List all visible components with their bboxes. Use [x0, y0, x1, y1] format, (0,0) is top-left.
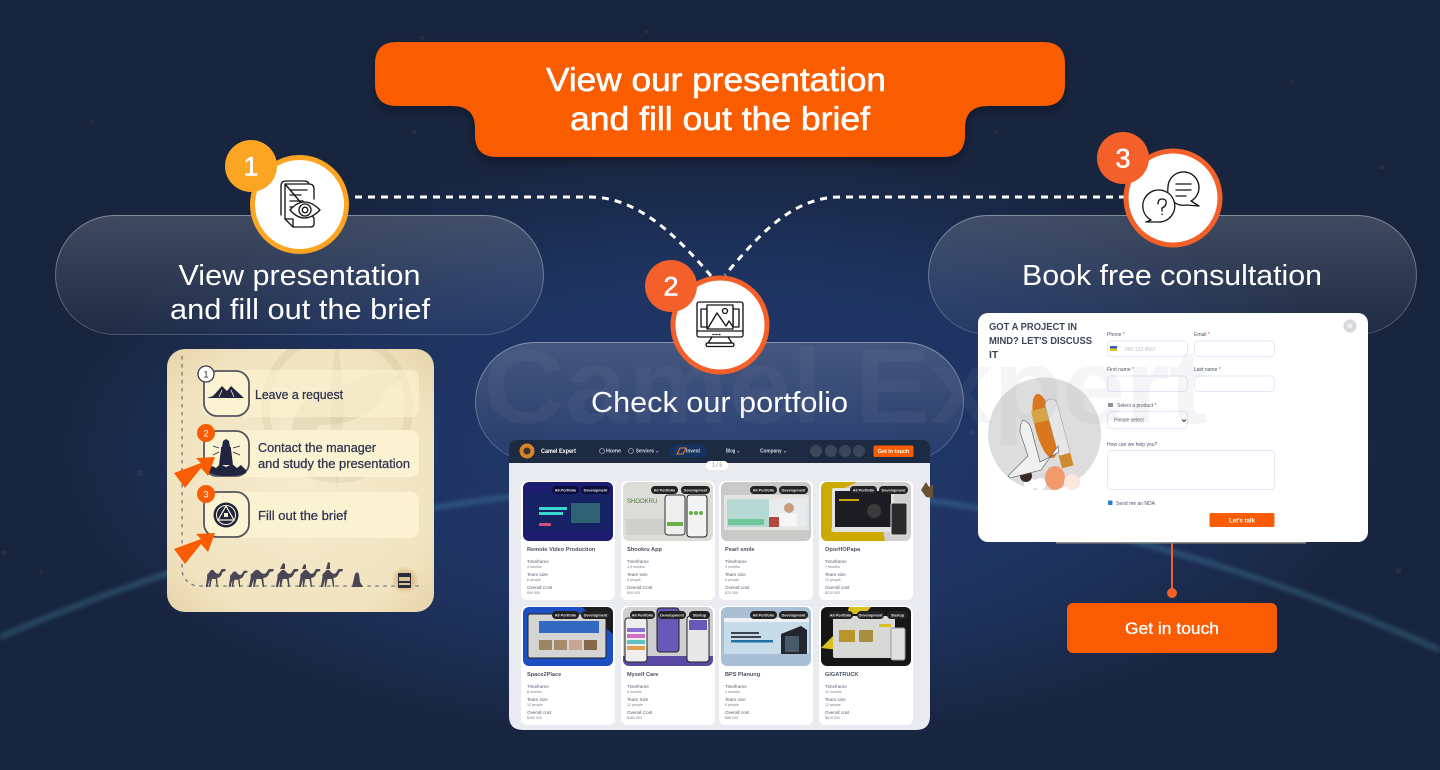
site navigation bar: Blog ⌄ — [726, 449, 740, 455]
row: leave a request — [198, 366, 419, 417]
portfolio card: Space2Place: Overall cost — [527, 710, 552, 715]
portfolio card: BPS Planung: Overall cost — [725, 710, 750, 715]
panel: step 3 pill — [928, 216, 1416, 334]
rocket flames — [1020, 466, 1080, 490]
get in touch button: Get in touch — [1125, 620, 1219, 638]
portfolio card: OporHOPapa: Overall cost — [825, 585, 850, 590]
form fields — [1108, 341, 1274, 490]
rocket fuel tank — [1031, 394, 1056, 458]
form heading — [989, 321, 1092, 361]
portfolio card: Myself Care: Overall Cost — [627, 710, 653, 715]
portfolio card: Myself Care: Myself Care — [627, 672, 658, 678]
dotted route line — [182, 356, 420, 586]
portfolio card: OporHOPapa: Team size — [825, 572, 846, 577]
portfolio card: OporHOPapa — [819, 481, 913, 600]
icon: chat bubbles with question mark — [1143, 172, 1199, 222]
step 1 icon badge — [225, 140, 346, 252]
row: contact the manager: Contact the manager — [258, 441, 376, 455]
site navigation bar: 1 / 3 — [712, 462, 722, 468]
panel: step 1 pill — [56, 216, 544, 334]
portfolio card: Remote Video Production: Overall Cost — [527, 585, 553, 590]
form submit button: Let's talk — [1229, 518, 1256, 524]
step 3 contact form: Select a product * — [1117, 403, 1157, 409]
portfolio card: Pearl smile: Timeframe — [725, 559, 747, 564]
site navigation bar: Invest — [686, 449, 700, 455]
row: fill out the brief: 3 — [203, 490, 209, 500]
portfolio card: GIGATRUCK: Development — [859, 613, 883, 617]
portfolio card: Shookru App: 4,5 months — [627, 565, 645, 569]
step 3 contact form — [978, 313, 1368, 544]
portfolio card: BPS Planung: 4 months — [725, 690, 740, 694]
step 2 heading: Check our portfolio — [591, 387, 848, 419]
row: contact the manager: and study the presentation — [258, 457, 410, 471]
portfolio card: GIGATRUCK: $615 000 — [825, 716, 840, 720]
portfolio card: GIGATRUCK: Timeframe — [825, 684, 847, 689]
portfolio card: Space2Place: Space2Place — [527, 672, 561, 678]
parchment emblem watermark — [265, 335, 409, 490]
portfolio card: Pearl smile: Team size — [725, 572, 746, 577]
watermark wordmark: Camel Expert — [483, 328, 1207, 446]
row: leave a request: Leave a request — [255, 388, 344, 402]
portfolio card: Shookru App — [621, 481, 715, 600]
portfolio card: Remote Video Production: All Portfolio — [555, 488, 577, 492]
portfolio card: BPS Planung: Timeframe — [725, 684, 747, 689]
step 3 connector line and dot — [1167, 540, 1177, 598]
portfolio card: OporHOPapa: OporHOPapa — [825, 547, 861, 553]
portfolio card: Pearl smile: Overall cost — [725, 585, 750, 590]
portfolio card: Shookru App: Timeframe — [627, 559, 649, 564]
portfolio card: Space2Place — [521, 606, 615, 725]
portfolio card: Shookru App: 8 people — [627, 578, 641, 582]
step 1 icon badge: 1 — [243, 152, 259, 182]
portfolio card: Myself Care: All Portfolio — [632, 613, 654, 617]
portfolio card: Myself Care: Startup — [693, 613, 707, 617]
portfolio card: Remote Video Production: Development — [584, 488, 608, 492]
step 3 contact form: Email * — [1194, 332, 1210, 338]
row: contact the manager: 2 — [203, 428, 209, 438]
dashed connector from step 3 to step 2 — [725, 197, 1126, 275]
step 3 contact form: Please select — [1114, 418, 1144, 424]
portfolio card: Myself Care: 12 people — [627, 703, 643, 707]
step 3 contact form: 050 123 4567 — [1125, 347, 1156, 353]
portfolio card: OporHOPapa: 12 people — [825, 578, 841, 582]
portfolio card: Shookru App: SHOOKRU — [627, 499, 657, 505]
arrow: pointing at step 2 — [174, 457, 215, 488]
portfolio card: Pearl smile: $70 000 — [725, 591, 738, 595]
portfolio card: Myself Care: 6 months — [627, 690, 642, 694]
portfolio card: OporHOPapa: $220 000 — [825, 591, 840, 595]
portfolio card: Pearl smile: Development — [782, 488, 806, 492]
portfolio card: Pearl smile: 6 people — [725, 578, 739, 582]
get in touch button — [1067, 603, 1277, 653]
row: leave a request: 1 — [203, 370, 209, 380]
portfolio card: Remote Video Production — [521, 481, 615, 600]
portfolio card: Pearl smile: All Portfolio — [753, 488, 775, 492]
step 3 contact form: How can we help you? — [1107, 442, 1158, 448]
form heading: GOT A PROJECT IN — [989, 321, 1077, 333]
portfolio card: OporHOPapa: Development — [882, 488, 906, 492]
panel: step 2 pill — [476, 342, 964, 462]
portfolio card: Pearl smile: 5 months — [725, 565, 740, 569]
portfolio card: Space2Place: Timeframe — [527, 684, 549, 689]
form heading: MIND? LET'S DISCUSS — [989, 335, 1092, 347]
portfolio card: GIGATRUCK: GIGATRUCK — [825, 672, 858, 678]
portfolio card: Pearl smile — [719, 481, 813, 600]
destination icon — [391, 566, 419, 594]
arrow: pointing at step 3 — [174, 533, 215, 564]
portfolio card: Myself Care: Timeframe — [627, 684, 649, 689]
portfolio card: BPS Planung: BPS Planung — [725, 672, 761, 678]
portfolio card: Shookru App: Team size — [627, 572, 648, 577]
form heading: IT — [989, 349, 999, 361]
step 3 contact form: Send me an NDA — [1116, 501, 1156, 507]
portfolio card: BPS Planung: 8 people — [725, 703, 739, 707]
site navigation bar: Company ⌄ — [760, 449, 787, 455]
icon: monitor with image — [697, 302, 743, 346]
portfolio card: Space2Place: All Portfolio — [555, 613, 577, 617]
portfolio card: OporHOPapa: 7 months — [825, 565, 840, 569]
step 3 icon badge: 3 — [1115, 144, 1131, 174]
step 1 heading: and fill out the brief — [170, 294, 431, 326]
site navigation bar: Get in touch — [878, 449, 909, 455]
step 3 contact form: Phone * — [1107, 332, 1125, 338]
site navigation bar: Services ⌄ — [636, 449, 659, 455]
step 1 heading — [170, 260, 431, 326]
portfolio card: Space2Place: Development — [584, 613, 608, 617]
camel caravan — [206, 562, 363, 587]
portfolio card: Remote Video Production: Timeframe — [527, 559, 549, 564]
portfolio card: GIGATRUCK: 12 months — [825, 690, 842, 694]
portfolio card: Space2Place: 8 months — [527, 690, 542, 694]
portfolio card: GIGATRUCK: 12 people — [825, 703, 841, 707]
portfolio card: Space2Place: $260 000 — [527, 716, 542, 720]
portfolio card: Remote Video Production: 6 people — [527, 578, 541, 582]
shuttle orbiter — [1008, 420, 1059, 478]
form submit button — [1210, 513, 1274, 527]
step 3 icon badge — [1097, 132, 1220, 245]
portfolio card: Shookru App: Overall Cost — [627, 585, 653, 590]
site navigation bar — [509, 440, 930, 470]
portfolio card: BPS Planung — [719, 606, 813, 725]
row: contact the manager — [197, 424, 419, 477]
portfolio card: Remote Video Production: Team size — [527, 572, 548, 577]
portfolio card: GIGATRUCK: Overall cost — [825, 710, 850, 715]
portfolio card: Myself Care: Team Size — [627, 697, 649, 702]
step 1 parchment card — [167, 335, 434, 612]
portfolio card: BPS Planung: Development — [782, 613, 806, 617]
portfolio card: Myself Care — [621, 606, 715, 725]
portfolio card: GIGATRUCK: Team size — [825, 697, 846, 702]
title banner — [375, 42, 1065, 157]
decorative figure beside cards — [921, 482, 933, 498]
portfolio card: Myself Care: Development — [660, 613, 685, 617]
step 3 contact form: Last name * — [1194, 367, 1221, 373]
portfolio card: Shookru App: Development — [684, 488, 708, 492]
portfolio card: Remote Video Production: $90 000 — [527, 591, 540, 595]
portfolio card: GIGATRUCK — [819, 606, 913, 725]
portfolio card: Pearl smile: Pearl smile — [725, 547, 755, 553]
portfolio card: BPS Planung: Team size — [725, 697, 746, 702]
dashed connector from step 1 to step 2 — [355, 197, 712, 277]
step 2 icon badge — [645, 260, 767, 372]
portfolio card: GIGATRUCK: Startup — [891, 613, 905, 617]
row: fill out the brief — [197, 485, 419, 538]
step 3 heading: Book free consultation — [1022, 260, 1322, 292]
portfolio card: Remote Video Production: 4 months — [527, 565, 542, 569]
portfolio card: OporHOPapa: All Portfolio — [853, 488, 875, 492]
site navigation bar: Home — [606, 449, 621, 455]
step 1 heading: View presentation — [178, 260, 420, 292]
form close button — [1344, 320, 1356, 332]
step 2 portfolio screenshot — [509, 440, 933, 730]
row: fill out the brief: Fill out the brief — [258, 509, 348, 523]
portfolio card: OporHOPapa: Timeframe — [825, 559, 847, 564]
step 2 icon badge: 2 — [663, 272, 679, 302]
title banner: and fill out the brief — [570, 100, 871, 137]
rocket illustration — [988, 378, 1101, 490]
portfolio card: BPS Planung: All Portfolio — [753, 613, 775, 617]
portfolio card: Remote Video Production: Remote Video Production — [527, 547, 596, 553]
title banner: View our presentation — [546, 61, 886, 98]
icon: document with eye — [281, 181, 320, 227]
portfolio card: Space2Place: Team size — [527, 697, 548, 702]
step 3 contact form: First name * — [1107, 367, 1134, 373]
portfolio card: Shookru App: All Portfolio — [654, 488, 676, 492]
portfolio card: BPS Planung: $86 000 — [725, 716, 738, 720]
portfolio card: GIGATRUCK: All Portfolio — [830, 613, 852, 617]
portfolio card: Shookru App: Shookru App — [627, 547, 662, 553]
portfolio card: Shookru App: $95 000 — [627, 591, 640, 595]
site navigation bar: Camel Expert — [541, 449, 576, 455]
portfolio card: Space2Place: 12 people — [527, 703, 543, 707]
portfolio card: Myself Care: $360 000 — [627, 716, 642, 720]
rocket booster — [1044, 398, 1074, 468]
